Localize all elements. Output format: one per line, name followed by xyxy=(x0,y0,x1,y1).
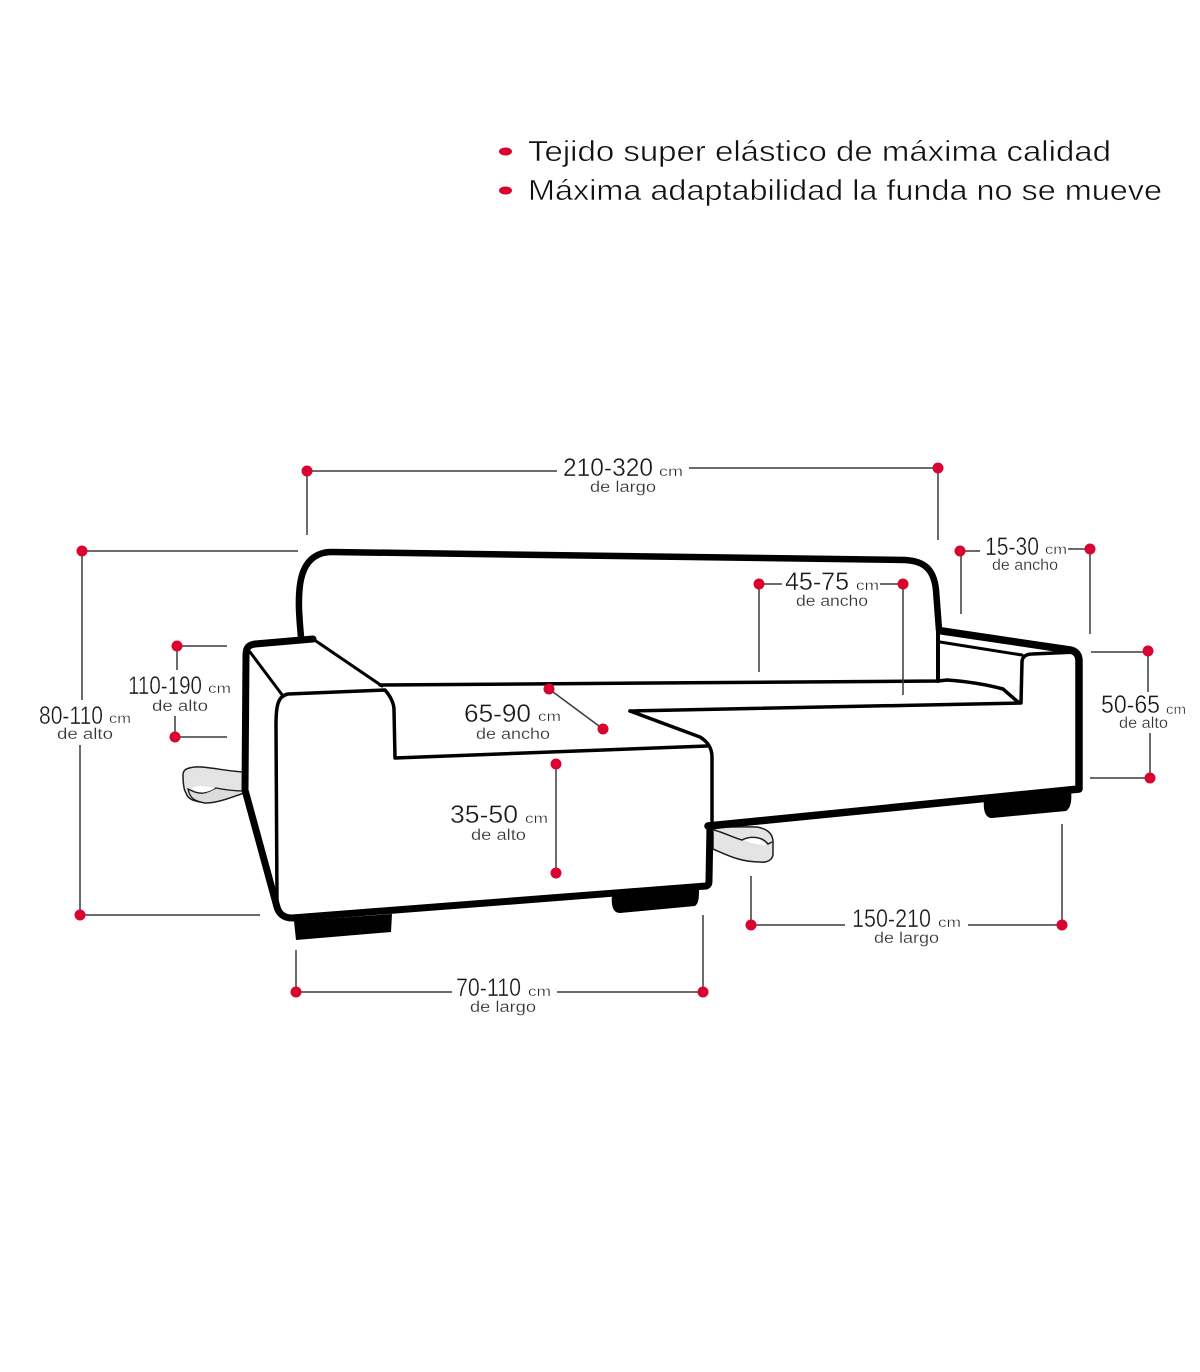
dimension: main length 150-210 cm xyxy=(746,824,1068,947)
dimension: seat depth 45-75 cm: 45-75 xyxy=(785,568,849,596)
dimension: main length 150-210 cm: de largo xyxy=(874,930,939,947)
dimension: back height 80-110 cm xyxy=(39,546,298,920)
dimension: arm width 15-30 cm: de ancho xyxy=(992,557,1058,574)
dimension: chaise width 65-90 cm: de ancho xyxy=(476,726,550,743)
dimension: seat depth 45-75 cm xyxy=(754,568,908,695)
dimension: arm height 110-190 cm: cm xyxy=(208,680,231,696)
dimension: arm width 15-30 cm: cm xyxy=(1045,541,1067,557)
dimension: arm height 110-190 cm: de alto xyxy=(152,698,208,715)
dimension: chaise width 65-90 cm: cm xyxy=(538,708,561,724)
dimension: back height 80-110 cm: de alto xyxy=(57,726,113,743)
dimension: chaise length 70-110 cm: cm xyxy=(528,983,551,999)
right strap xyxy=(713,827,773,862)
sofa inner lines xyxy=(250,630,1077,903)
dimension: total length 210-320 cm xyxy=(302,454,944,540)
feature text 2: Máxima adaptabilidad la funda no se mueve xyxy=(528,175,1162,207)
dimension: arm height 50-65 cm: de alto xyxy=(1119,715,1168,732)
dimension: seat height 35-50 cm: cm xyxy=(525,810,548,826)
dimension: back height 80-110 cm: 80-110 xyxy=(39,702,103,730)
feature list xyxy=(499,136,1162,207)
left strap xyxy=(183,767,244,803)
dimension: chaise length 70-110 cm: de largo xyxy=(470,999,536,1016)
dimension: seat height 35-50 cm: 35-50 xyxy=(450,801,518,829)
dimension: total length 210-320 cm: cm xyxy=(659,463,683,479)
sofa illustration xyxy=(183,552,1079,940)
bullet 2 xyxy=(499,186,512,194)
dimension: arm height 110-190 cm xyxy=(128,640,231,742)
dimension: arm width 15-30 cm xyxy=(954,533,1096,634)
dimension: seat depth 45-75 cm: cm xyxy=(856,577,879,593)
sofa outer silhouette xyxy=(299,552,939,637)
dimension: back height 80-110 cm: cm xyxy=(109,710,131,726)
dimension: chaise width 65-90 cm xyxy=(464,684,608,743)
dimension: chaise length 70-110 cm xyxy=(290,915,708,1016)
dimension: seat height 35-50 cm xyxy=(450,758,562,878)
dimension: seat depth 45-75 cm: de ancho xyxy=(796,593,868,610)
dimension: seat height 35-50 cm: de alto xyxy=(471,827,526,844)
dimension: arm height 50-65 cm: 50-65 xyxy=(1101,691,1160,719)
dimension: arm height 50-65 cm: cm xyxy=(1166,701,1186,717)
dimension: total length 210-320 cm: de largo xyxy=(590,479,656,496)
dimension: arm width 15-30 cm: 15-30 xyxy=(985,533,1039,561)
feature text 1: Tejido super elástico de máxima calidad xyxy=(528,136,1111,168)
dimension: main length 150-210 cm: cm xyxy=(938,914,961,930)
dimension: total length 210-320 cm: 210-320 xyxy=(563,454,653,482)
dimension: arm height 50-65 cm xyxy=(1090,646,1186,784)
bullet 1 xyxy=(499,148,512,156)
dimension: main length 150-210 cm: 150-210 xyxy=(852,905,931,933)
dimension: arm height 110-190 cm: 110-190 xyxy=(128,672,202,700)
sofa legs xyxy=(294,790,1071,940)
dimension: chaise width 65-90 cm: 65-90 xyxy=(464,700,531,728)
dimension: chaise length 70-110 cm: 70-110 xyxy=(456,974,521,1002)
